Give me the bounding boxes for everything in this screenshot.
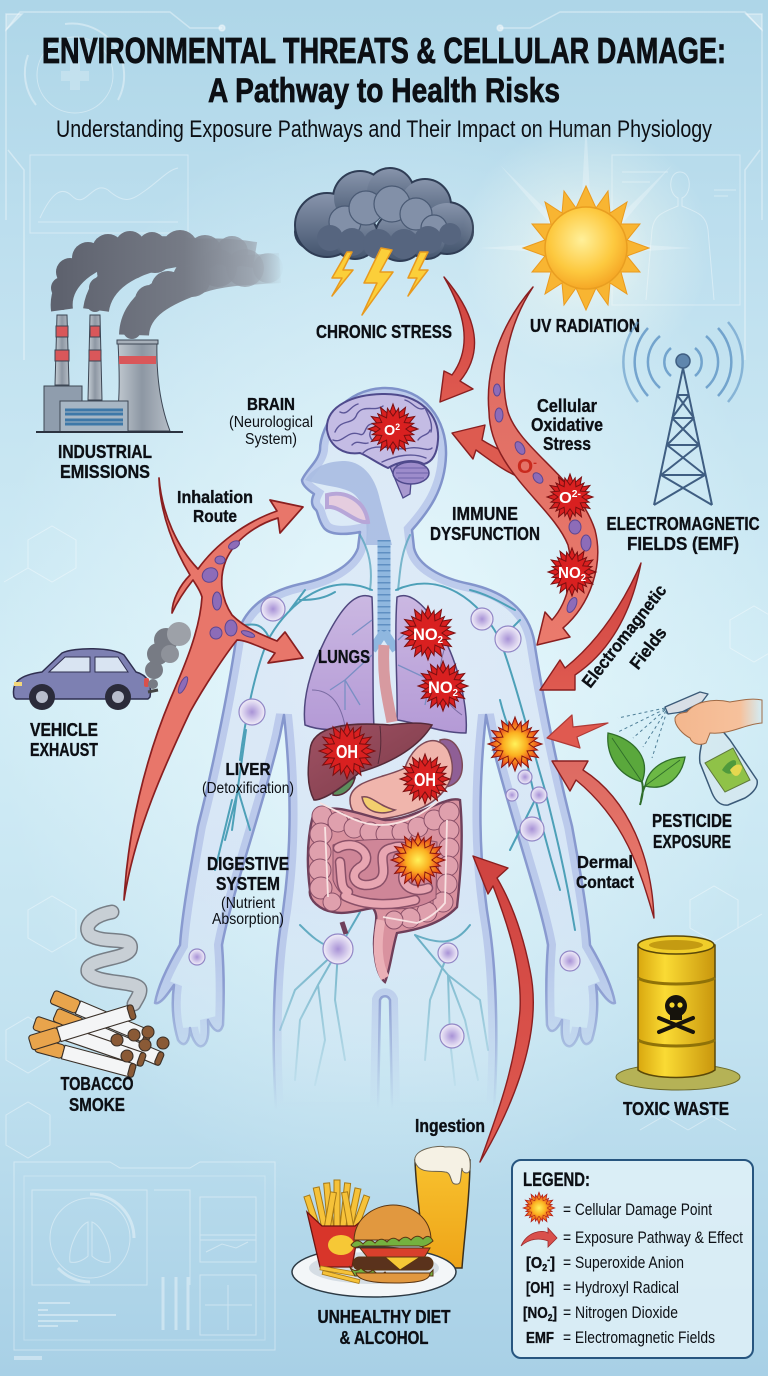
label: digestive system: (Nutrient (221, 895, 276, 912)
legend row: nitrogen dioxide: [NO (523, 1305, 552, 1322)
arrow: chronic stress to brain (440, 277, 475, 402)
HUD lung scan panel (14, 1162, 275, 1358)
label: unhealthy diet and alcohol (318, 1306, 451, 1348)
damage point: brain (367, 403, 419, 455)
legend row: nitrogen dioxide (523, 1303, 678, 1324)
organ: large intestine (308, 799, 462, 982)
label: dermal contact (576, 852, 634, 892)
damage point: lung lower: NO (428, 678, 454, 697)
label: industrial emissions (58, 441, 152, 482)
organ: lungs (304, 596, 466, 733)
label: cellular oxidative stress: Stress (543, 434, 591, 454)
label: cellular oxidative stress: Oxidative (531, 415, 603, 435)
damage point: lung lower (417, 660, 469, 712)
damage point: UV band superoxide: O (559, 490, 571, 507)
label: pesticide exposure: EXPOSURE (653, 832, 731, 852)
arrow: UV radiation pathway (488, 287, 598, 645)
lymph nodes (189, 597, 580, 1048)
icon: car (13, 649, 158, 710)
icon: burger (349, 1205, 433, 1283)
icon: fries (304, 1180, 370, 1284)
icon: car exhaust smoke (145, 622, 191, 689)
legend row: nitrogen dioxide: ] (552, 1305, 557, 1322)
damage point: UV band superoxide: 2- (572, 489, 581, 500)
label: digestive system: SYSTEM (216, 874, 280, 894)
label: cellular oxidative stress: Cellular (537, 396, 597, 416)
legend row: superoxide: ] (550, 1255, 555, 1272)
label: electromagnetic fields (606, 513, 760, 554)
damage point: lung upper (400, 605, 456, 661)
legend row: superoxide (526, 1253, 684, 1274)
legend row: hydroxyl: [OH] (526, 1280, 554, 1297)
label: immune dysfunction: DYSFUNCTION (430, 523, 540, 544)
damage point: intestine (390, 832, 446, 888)
label: inhalation route (177, 487, 253, 526)
damage point: brain: O (384, 422, 396, 439)
label: brain: System) (245, 431, 297, 448)
legend row: hydroxyl: = Hydroxyl Radical (563, 1278, 679, 1297)
factory buildings (44, 386, 128, 432)
label: dermal contact: Contact (576, 872, 634, 892)
label: cellular oxidative stress (531, 396, 603, 454)
label: toxic waste: TOXIC WASTE (623, 1099, 729, 1119)
lymphatic vessels: pelvis and legs (280, 912, 488, 1085)
organ: liver (308, 723, 432, 800)
arrow: ingestion (473, 856, 533, 1162)
label: electromagnetic fields: FIELDS (EMF) (627, 533, 739, 554)
organ: stomach and spleen (350, 739, 462, 819)
label: inhalation route: Inhalation (177, 487, 253, 507)
legend row: superoxide: 2 (542, 1263, 548, 1274)
esophagus (384, 645, 392, 722)
icon: cigarette smoke (88, 912, 140, 1004)
damage point: UV band superoxide (546, 473, 594, 521)
icon: storm cloud (294, 167, 474, 262)
legend row: damage point: = Cellular Damage Point (563, 1200, 712, 1219)
label: liver: LIVER (226, 759, 271, 779)
title: A Pathway to Health Risks (208, 72, 560, 110)
icon: toxic waste barrel (616, 936, 740, 1090)
HUD anatomy panel (612, 155, 740, 305)
label: brain (229, 394, 313, 448)
damage point: stomach (399, 753, 451, 805)
damage point: stomach: OH (414, 770, 436, 790)
legend row: hydroxyl (526, 1278, 679, 1297)
arrow: pesticide exposure (547, 715, 608, 748)
arrow: UV radiation pathway: O (517, 456, 533, 478)
organ: brain (327, 394, 438, 498)
damage point: liver: OH (336, 742, 358, 762)
label: tobacco smoke: SMOKE (69, 1095, 125, 1115)
label: brain: BRAIN (247, 394, 295, 414)
label: unhealthy diet and alcohol: UNHEALTHY DIET (318, 1306, 451, 1327)
label: tobacco smoke: TOBACCO (60, 1074, 134, 1094)
label: chronic stress: CHRONIC STRESS (316, 321, 452, 342)
arrow: oxidative stress branch to brain (452, 425, 530, 480)
legend row: nitrogen dioxide: = Nitrogen Dioxide (563, 1303, 678, 1322)
damage point: lung lower: 2 (453, 688, 458, 699)
label: electromagnetic fields route: Fields (625, 623, 671, 673)
icon: food plate (292, 1247, 456, 1297)
HUD chart panel (30, 155, 188, 233)
legend row: EMF (526, 1328, 715, 1347)
legend heading: LEGEND: (523, 1170, 590, 1191)
label: immune dysfunction: IMMUNE (452, 503, 518, 524)
label: pesticide exposure: PESTICIDE (652, 811, 732, 831)
chimneys (55, 315, 170, 431)
label: inhalation route: Route (193, 506, 237, 526)
legend row: EMF: = Electromagnetic Fields (563, 1328, 715, 1347)
arrow: UV radiation pathway: - (533, 457, 537, 469)
label: tobacco smoke (60, 1074, 134, 1115)
arrow: electromagnetic fields (540, 563, 641, 690)
organ: small intestine (333, 839, 437, 909)
lymphatic vessels (215, 535, 575, 930)
legend row: EMF: EMF (526, 1330, 554, 1347)
label: immune dysfunction (430, 503, 540, 544)
icon: lightning bolts (332, 248, 428, 315)
label: unhealthy diet and alcohol: & ALCOHOL (340, 1327, 428, 1348)
arrow: dermal contact (552, 761, 654, 918)
label: lungs: LUNGS (318, 646, 370, 667)
legend row: nitrogen dioxide: 2 (548, 1313, 553, 1324)
label: digestive system: Absorption) (212, 911, 284, 928)
label: vehicle exhaust: VEHICLE (30, 720, 98, 740)
label: liver: (Detoxification) (202, 780, 294, 797)
label: ingestion: Ingestion (415, 1116, 485, 1136)
label: digestive system: DIGESTIVE (207, 854, 289, 874)
icon: industrial factory (36, 230, 283, 432)
icon: beer glass (415, 1146, 470, 1268)
title (42, 30, 726, 110)
label: pesticide exposure (652, 811, 732, 852)
label: dermal contact: Dermal (577, 852, 633, 872)
legend row: damage point (522, 1191, 712, 1225)
icon: leaves (608, 733, 685, 805)
legend row: superoxide: = Superoxide Anion (563, 1253, 684, 1272)
label: brain: (Neurological (229, 414, 313, 431)
label: vehicle exhaust: EXHAUST (30, 740, 98, 760)
damage point: arm (487, 716, 543, 772)
damage point: UV band nitrogen dioxide (547, 547, 597, 597)
label: vehicle exhaust (30, 720, 98, 760)
label: industrial emissions: INDUSTRIAL (58, 441, 152, 462)
icon: sun (461, 120, 711, 373)
icon: pesticide spray bottle (618, 692, 762, 805)
damage point: lung upper: 2 (438, 635, 443, 646)
blood cells in inhalation arrows (176, 539, 255, 694)
damage point: UV band nitrogen dioxide: 2 (581, 573, 586, 584)
icon: cigarettes (28, 990, 169, 1078)
HUD medical cross dial (25, 24, 124, 113)
panel: legend (512, 1160, 753, 1358)
HUD hexagon pattern (4, 526, 768, 1158)
legend row: superoxide: [O (526, 1255, 544, 1272)
damage point: liver (318, 722, 376, 780)
organ: airway and nasal cavity (305, 461, 396, 650)
damage point: UV band nitrogen dioxide: NO (558, 565, 582, 582)
label: digestive system (207, 854, 289, 928)
HUD frame: top (6, 12, 762, 360)
human body silhouette (155, 388, 615, 1110)
label: UV radiation: UV RADIATION (530, 315, 640, 336)
icon: EMF tower (623, 322, 743, 505)
label: industrial emissions: EMISSIONS (60, 461, 150, 482)
damage point: lung upper: NO (413, 625, 438, 644)
legend row: superoxide: - (547, 1255, 550, 1266)
label: electromagnetic fields route: Electromagnetic (578, 580, 671, 691)
smoke plumes (51, 230, 283, 339)
arrow: inhalation crossing (124, 478, 303, 900)
label: liver (202, 759, 294, 797)
damage point: brain: 2 (395, 422, 400, 432)
